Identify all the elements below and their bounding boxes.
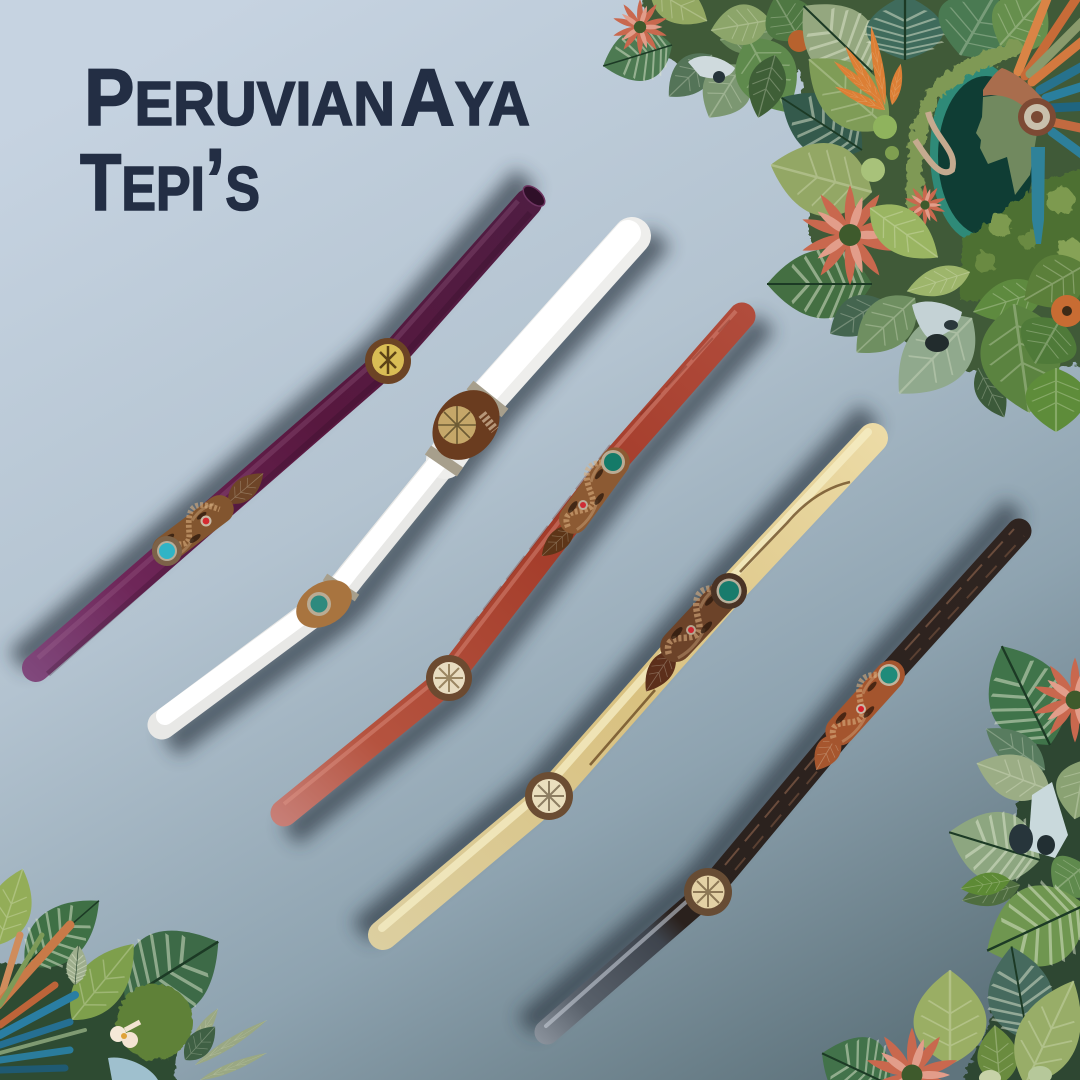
stream [108,1058,158,1080]
title: Peruvian Aya Tepi's: Tepi’s [80,130,260,229]
small carved node with teal gem [287,570,361,638]
waterfall stream with rocks [912,301,962,352]
flute: dark [546,529,1024,1032]
curved hook ornament [915,112,953,172]
upper cluster leaves [595,0,821,130]
upper leaves by the arch [761,0,1066,227]
flute: red [284,311,742,813]
feather fan [0,925,85,1070]
moss ring [914,48,1015,205]
snake carving with green gem [636,565,752,698]
moss forest [960,165,1080,300]
citrine flower node [365,338,411,384]
snake carving with turquoise gem [145,465,270,569]
hanging ornament [1031,147,1045,244]
flute: cream [382,432,873,935]
base [0,930,180,1080]
flute shadows [18,178,1015,1026]
snake carving with turquoise gem [806,652,911,776]
headdress feathers [1018,0,1080,160]
pale flower node [525,772,573,820]
teal arch [930,62,1026,242]
snake carving with green gem [535,440,636,563]
coral flowers [1033,658,1080,742]
fruits [861,115,899,182]
spiky leaves [176,1005,269,1080]
coral flowers [801,184,946,285]
title: Peruvian Aya Tepi's [80,45,530,229]
arch interior [938,76,1034,236]
title: Peruvian Aya Tepi's: Peruvian Aya [84,45,530,144]
headdress band [983,68,1050,118]
flute: white [162,233,632,725]
base [950,660,1080,1080]
waterfall with rocks [1009,782,1068,858]
bright green leaf [857,190,951,275]
pale flower node [684,868,732,916]
orange flower [1051,295,1080,327]
orange bird of paradise [831,25,906,114]
flute: purple [36,182,548,674]
white flower [110,1022,140,1048]
stone face profile [976,92,1040,195]
moss mound [117,984,193,1060]
lower left leaves [767,242,1080,432]
small fern [65,944,89,986]
medallion [1018,98,1056,136]
foliage: bottom left [0,862,269,1080]
large carved node with flower disc [419,377,513,473]
flute mouth [520,182,548,210]
foliage base [640,0,1080,372]
foliage: top right with tribal figure [595,0,1080,432]
small dark-green sprig [959,869,1012,900]
fruits [979,1066,1052,1080]
foliage: bottom right [807,629,1080,1080]
pale flower node [426,655,472,701]
